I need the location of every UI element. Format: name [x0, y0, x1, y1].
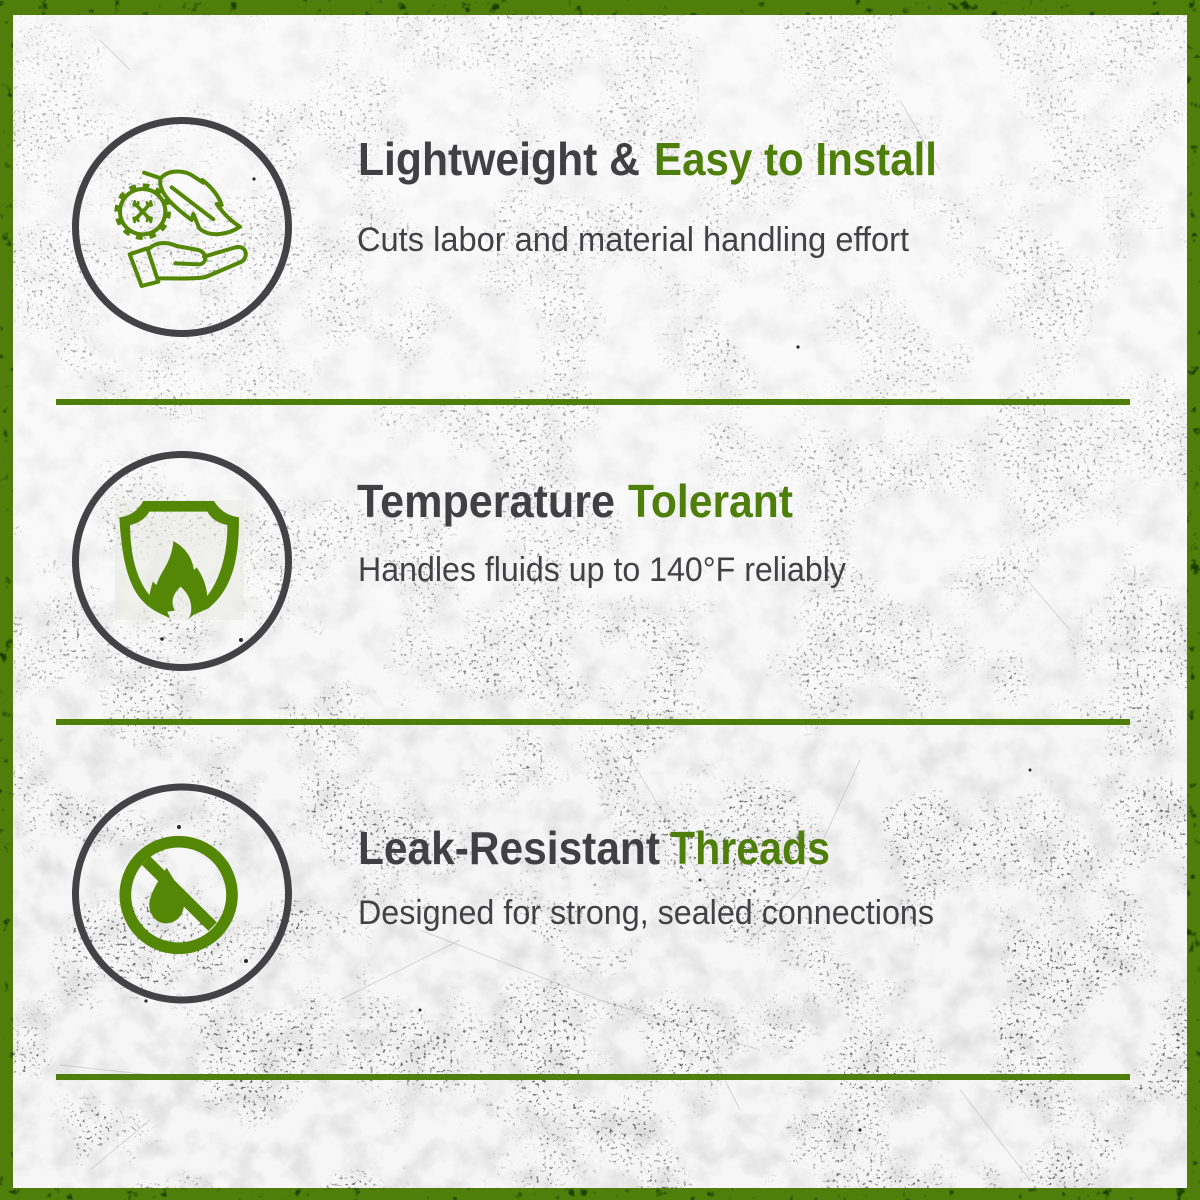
heading: Temperature Tolerant — [357, 475, 793, 527]
heading: Temperature Tolerant: Temperature — [357, 475, 615, 527]
divider 3 — [56, 1074, 1130, 1080]
icon: shield with flame in circle — [76, 454, 288, 668]
divider 2 — [56, 719, 1130, 725]
heading: Leak-Resistant Threads: Threads — [670, 822, 830, 874]
heading: Leak-Resistant Threads — [358, 822, 830, 874]
heading: Temperature Tolerant: Tolerant — [628, 475, 793, 527]
heading: Leak-Resistant Threads: Leak-Resistant — [358, 822, 660, 874]
description: Designed for: Designed for strong, sealed connections — [358, 894, 934, 932]
description: Cuts labor: Cuts labor and material handling effort — [357, 221, 910, 259]
heading: Lightweight & Easy to Install: Lightweight & — [358, 133, 640, 185]
description: Handles fluids: Handles fluids up to 140°F reliably — [358, 551, 846, 589]
heading: Lightweight & Easy to Install — [358, 133, 937, 185]
heading: Lightweight & Easy to Install: Easy to Install — [654, 133, 937, 185]
icon: leaf, gear and hand in circle — [76, 120, 288, 334]
icon: no-leak drop in circle — [76, 787, 288, 1000]
divider 1 — [56, 399, 1130, 405]
